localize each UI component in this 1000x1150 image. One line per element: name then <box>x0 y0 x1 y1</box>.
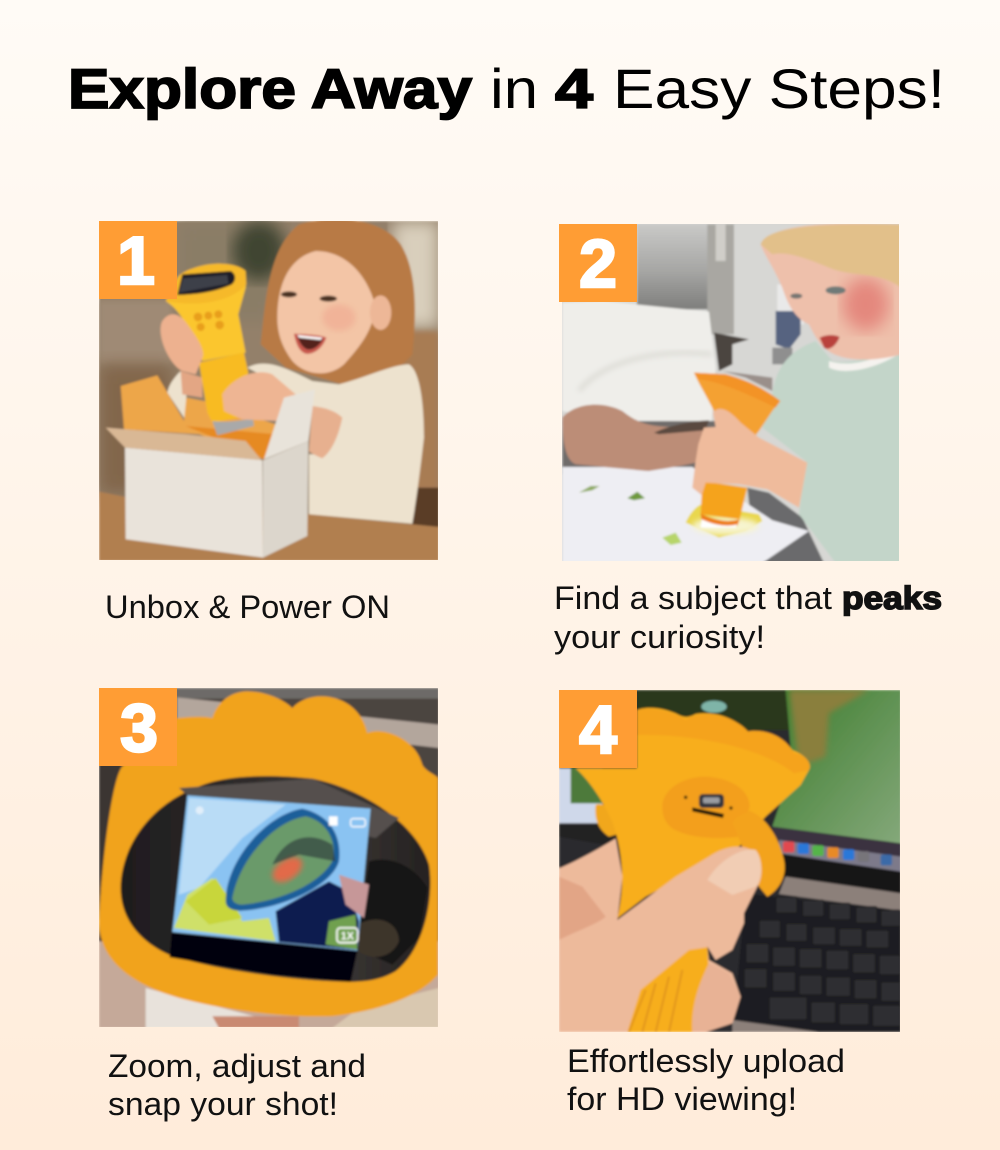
title: Explore Away <box>68 57 472 120</box>
panel: step 4 upload <box>559 690 901 1117</box>
caption: step 4: for HD viewing! <box>567 1081 797 1117</box>
caption: step 2: Find a subject that <box>554 580 832 616</box>
badge: step 4: 4 <box>579 692 617 768</box>
badge: step 2 <box>559 224 637 302</box>
title: Easy Steps! <box>613 57 945 120</box>
caption: step 1: Unbox & Power ON <box>105 589 390 625</box>
title: in <box>490 57 538 120</box>
badge: step 3 <box>99 688 177 766</box>
panel: step 1 unbox <box>99 219 439 625</box>
caption: step 4 <box>567 1043 845 1117</box>
caption: step 4: Effortlessly upload <box>567 1043 845 1079</box>
photo: microscope screen close-up <box>99 688 439 1028</box>
caption: step 2: peaks <box>842 580 942 616</box>
caption: step 3: Zoom, adjust and <box>108 1048 366 1084</box>
badge: step 1 <box>99 221 177 299</box>
badge: step 3: 3 <box>120 690 158 766</box>
caption: step 2 <box>554 580 942 655</box>
caption: step 2: your curiosity! <box>554 619 765 655</box>
badge: step 2: 2 <box>579 226 617 302</box>
photo: child unboxing microscope <box>99 219 439 561</box>
panel: step 2 find subject <box>554 221 942 655</box>
photo: toddler using microscope on leaf <box>559 221 901 563</box>
photo: microscope screen close-up: 1X <box>341 930 355 942</box>
badge: step 4 <box>559 690 637 768</box>
caption: step 3: snap your shot! <box>108 1086 338 1122</box>
photo: hand holding microscope over laptop <box>559 690 901 1032</box>
title <box>68 57 945 120</box>
badge: step 1: 1 <box>117 223 155 299</box>
caption: step 3 <box>108 1048 366 1122</box>
panel: step 3 zoom and snap <box>99 688 439 1122</box>
title: 4 <box>555 57 593 120</box>
